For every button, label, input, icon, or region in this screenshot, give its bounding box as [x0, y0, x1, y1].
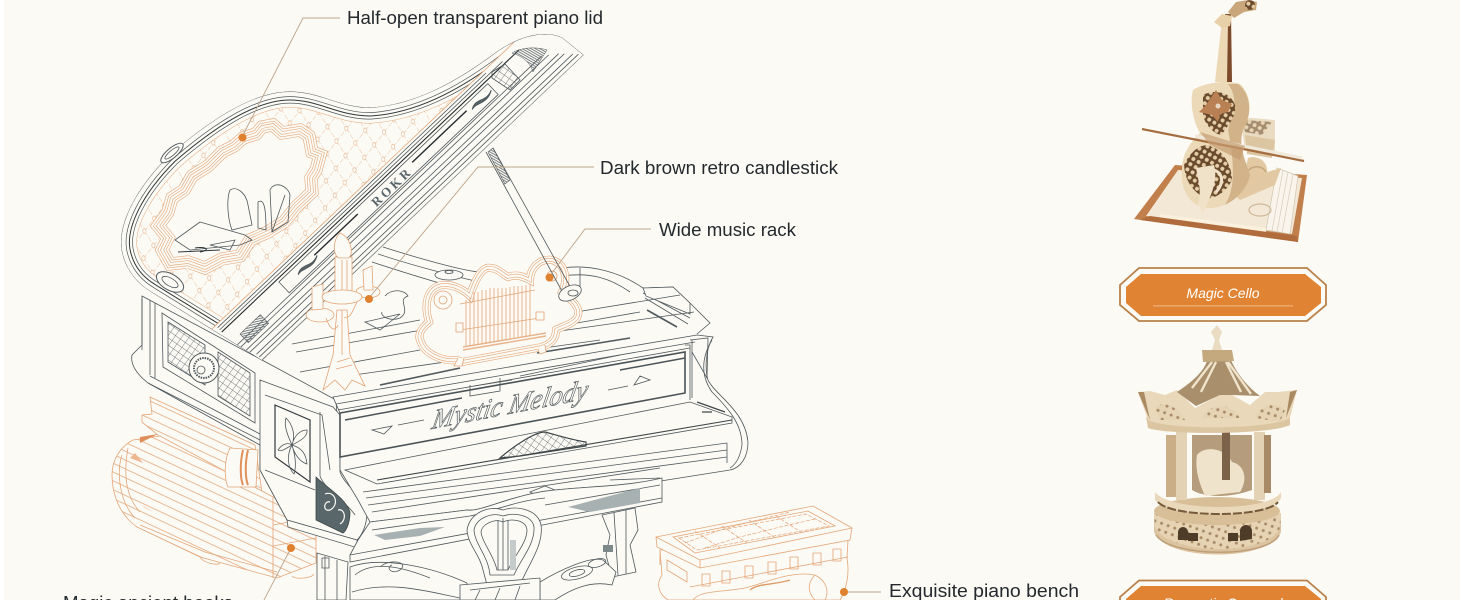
piano lid	[120, 34, 584, 361]
callout: half-open transparent piano lid	[238, 8, 603, 142]
product image: magic cello	[1134, 0, 1307, 242]
illustration: grand piano	[120, 2, 748, 600]
label: carousel	[1120, 580, 1326, 600]
piano legs	[317, 508, 638, 600]
nameplate text: Mystic Melody	[429, 374, 591, 436]
cloud window	[158, 125, 320, 268]
label: Magic Cello: Magic Cello	[1186, 285, 1260, 301]
lid front strip	[212, 34, 583, 360]
lid ornaments	[153, 140, 187, 296]
product image: carousel	[1138, 325, 1297, 554]
callout: wide music rack	[546, 220, 797, 282]
music rack	[419, 260, 578, 366]
keyslip ornament	[500, 432, 586, 458]
transparent diamond panel	[136, 98, 454, 316]
callout: half-open transparent piano lid: Half-open transparent piano lid	[347, 8, 603, 28]
callout: magic ancient books	[63, 544, 295, 600]
callout: dark brown retro candlestick	[365, 158, 839, 303]
candlestick	[306, 233, 380, 390]
side panel	[132, 296, 367, 540]
piano bench	[656, 506, 852, 600]
reflection in lid	[175, 185, 290, 252]
callout: dark brown retro candlestick: Dark brown retro candlestick	[600, 158, 839, 178]
lyre and stretcher	[350, 508, 616, 600]
ROKR lettering: ROKR	[368, 165, 414, 210]
front case	[333, 335, 748, 522]
front left cheek panel	[260, 380, 367, 548]
lower beam and skirt	[350, 478, 662, 562]
piano back rim	[292, 247, 710, 385]
callout: wide music rack: Wide music rack	[659, 220, 797, 240]
lid prop rod	[486, 148, 584, 304]
label: Magic Cello	[1120, 268, 1326, 321]
illustration: magic ancient books	[112, 397, 316, 578]
lid tip hatch	[492, 48, 547, 90]
